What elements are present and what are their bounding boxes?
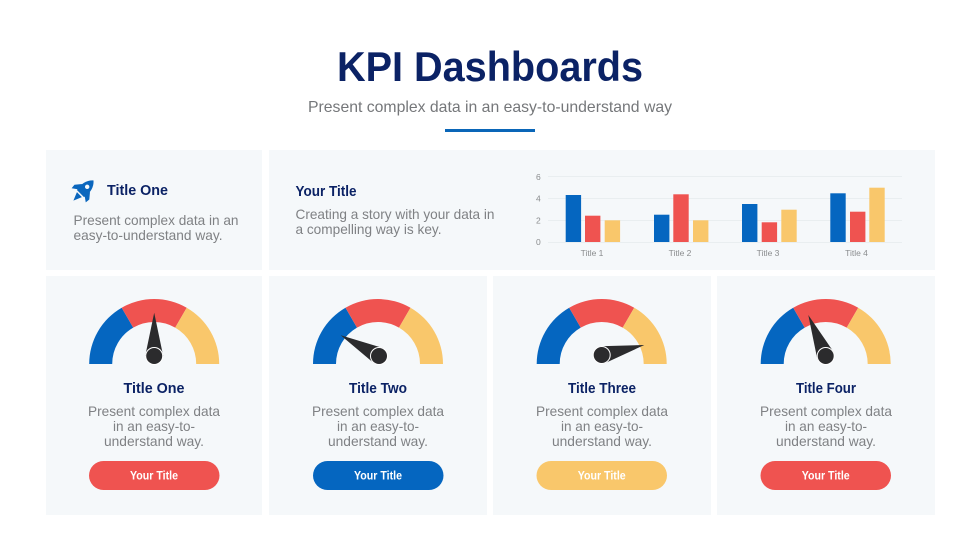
text block: understand way. [104, 433, 204, 449]
text block: Creating a story with your data in [296, 206, 494, 222]
text block: in an easy-to- [785, 418, 867, 434]
bar chart: 6 [536, 172, 541, 182]
text block: understand way. [552, 433, 652, 449]
text block: a compelling way is key. [296, 221, 442, 237]
gauge [313, 299, 443, 365]
text block: in an easy-to- [337, 418, 419, 434]
panel: gauge two [269, 276, 487, 515]
subtitle: Present complex data in an easy-to-understand way [308, 99, 672, 116]
gauge [89, 299, 219, 365]
gauge [761, 299, 891, 365]
heading: Your Title [296, 184, 356, 200]
button [536, 461, 667, 490]
bar chart [536, 172, 902, 258]
title underline [445, 129, 535, 132]
text block: Present complex data [760, 403, 892, 419]
heading: Title One [107, 183, 168, 199]
text block: in an easy-to- [561, 418, 643, 434]
text block: Present complex data [536, 403, 668, 419]
heading: Title One [124, 381, 184, 397]
bar chart: 4 [536, 194, 541, 204]
button: Your Title [130, 468, 178, 482]
text block: Present complex data [88, 403, 220, 419]
text block: Present complex data in an [74, 212, 238, 228]
button: Your Title [578, 468, 626, 482]
bar chart: Title 2 [669, 248, 692, 258]
title: KPI Dashboards [337, 43, 643, 90]
text block: understand way. [776, 433, 876, 449]
panel: gauge three [493, 276, 711, 515]
panel: title one intro [46, 150, 262, 270]
icon: rocket [66, 173, 101, 208]
text block [760, 403, 892, 449]
panel: gauge one [46, 276, 262, 515]
text block [296, 206, 494, 237]
text block [536, 403, 668, 449]
text block: easy-to-understand way. [74, 227, 222, 243]
bar chart: Title 1 [581, 248, 604, 258]
gauge [537, 299, 667, 364]
button [89, 461, 220, 490]
bar chart: Title 4 [845, 248, 868, 258]
text block [88, 403, 220, 449]
bar chart: Title 3 [757, 248, 780, 258]
panel: gauge four [717, 276, 935, 515]
heading: Title Four [796, 381, 856, 397]
button [760, 461, 891, 490]
bar chart: 2 [536, 216, 541, 226]
bar chart: 0 [536, 237, 541, 247]
panel: your title with bar chart [269, 150, 935, 270]
heading: Title Three [568, 381, 636, 397]
button [313, 461, 444, 490]
text block [74, 212, 238, 243]
text block [312, 403, 444, 449]
button: Your Title [802, 468, 850, 482]
heading: Title Two [349, 381, 407, 397]
text block: understand way. [328, 433, 428, 449]
text block: in an easy-to- [113, 418, 195, 434]
button: Your Title [354, 468, 402, 482]
text block: Present complex data [312, 403, 444, 419]
